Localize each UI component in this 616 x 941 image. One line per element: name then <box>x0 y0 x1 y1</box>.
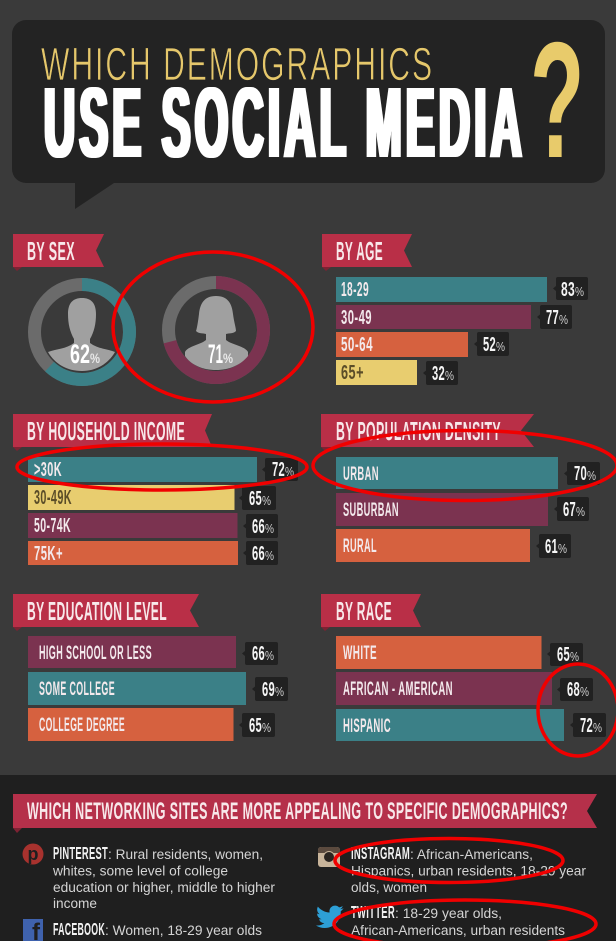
icon: pinterest: p <box>28 844 38 864</box>
bar: hispanic 72%: HISPANIC <box>343 716 391 737</box>
bar: white 65%: WHITE <box>343 643 377 664</box>
text: pinterest: : Rural residents, women, <box>108 847 263 862</box>
bar: under 30K 72%: 72 <box>272 459 285 481</box>
icon: instagram <box>318 847 340 867</box>
bar: suburban 67%: % <box>576 504 585 519</box>
text: instagram: Hispanics, urban residents, 18-29 year <box>351 864 587 878</box>
bar: suburban 67% <box>336 493 589 526</box>
heading: by race <box>321 594 421 631</box>
text: twitter <box>351 902 565 938</box>
bar: african-american 68%: AFRICAN - AMERICAN <box>343 679 453 700</box>
bar: 75K+ 66%: 75K+ <box>34 543 63 565</box>
female donut 71%: % <box>223 350 233 366</box>
bar: 75K+ 66%: % <box>265 548 274 563</box>
female donut 71% <box>168 282 264 378</box>
panel: by education level <box>13 594 288 741</box>
heading: by education level: BY EDUCATION LEVEL <box>27 596 167 626</box>
bar: 30-49K 65% <box>28 485 276 510</box>
bar: college degree 65%: COLLEGE DEGREE <box>39 715 125 736</box>
panel: by household income <box>13 414 298 565</box>
bar: african-american 68%: 68 <box>567 679 580 701</box>
male donut 62%: % <box>90 350 100 366</box>
heading: by household income: BY HOUSEHOLD INCOME <box>27 416 185 446</box>
text: instagram: INSTAGRAM <box>351 843 410 863</box>
female donut 71%: 71 <box>208 339 223 369</box>
bar: 50-64 52% <box>336 332 509 357</box>
male donut 62%: 62 <box>70 339 90 369</box>
bar: african-american 68%: % <box>580 684 589 699</box>
bar: college degree 65% <box>28 708 275 741</box>
bar: some college 69%: SOME COLLEGE <box>39 679 115 700</box>
bar: 18-29 83%: 83 <box>561 279 575 301</box>
bar: 65+ 32%: % <box>445 368 454 383</box>
bar: white 65% <box>336 636 583 669</box>
panel: networking sites <box>0 775 616 941</box>
bar: high school or less 66%: % <box>265 648 274 663</box>
icon: pinterest <box>22 844 44 864</box>
bar: 50-64 52%: % <box>496 339 505 354</box>
bar: urban 70%: URBAN <box>343 464 379 485</box>
bar: rural 61%: % <box>558 541 567 556</box>
bar: under 30K 72% <box>28 457 298 482</box>
bar: college degree 65%: % <box>262 720 271 735</box>
panel: by race <box>321 594 606 741</box>
heading: by household income <box>13 414 212 451</box>
question mark: ? <box>530 9 584 193</box>
panel: by sex <box>13 234 264 380</box>
text: twitter: African-Americans, urban residents <box>351 923 565 938</box>
bar: 65+ 32% <box>336 360 458 385</box>
bar: 30-49 77%: 30-49 <box>341 307 372 329</box>
bar: 30-49K 65%: 65 <box>249 488 262 510</box>
text: instagram: : African-Americans, <box>410 847 533 862</box>
male donut 62% <box>34 284 130 380</box>
text: pinterest: education or higher, middle to higher <box>53 880 275 895</box>
bar: high school or less 66%: 66 <box>252 643 265 665</box>
text: pinterest: income <box>53 896 97 911</box>
annotation: red circle around urban <box>313 430 616 500</box>
bar: urban 70% <box>336 457 600 489</box>
bar: some college 69% <box>28 672 288 705</box>
bar: 18-29 83%: 18-29 <box>341 279 369 301</box>
bar: urban 70%: 70 <box>574 463 587 485</box>
bar: 50-74K 66%: 66 <box>252 516 265 538</box>
bar: white 65%: 65 <box>557 644 570 666</box>
annotation: red circle around under 30K <box>17 444 307 490</box>
bar: some college 69%: % <box>275 684 284 699</box>
heading: by race: BY RACE <box>336 596 392 626</box>
text: twitter: : 18-29 year olds, <box>395 906 502 921</box>
bar: suburban 67%: 67 <box>563 499 576 521</box>
bar: under 30K 72%: % <box>285 464 294 479</box>
annotation: red circle around female <box>113 252 313 402</box>
icon: facebook <box>23 919 43 941</box>
bar: rural 61%: 61 <box>545 536 558 558</box>
bar: 18-29 83%: % <box>575 284 584 299</box>
title speech bubble <box>12 9 605 209</box>
bar: white 65%: % <box>570 649 579 664</box>
bar: urban 70%: % <box>587 468 596 483</box>
bar: 30-49 77%: % <box>559 312 568 327</box>
annotation: red circle around twitter <box>334 900 596 941</box>
bar: hispanic 72% <box>336 709 606 741</box>
panel: by population density <box>321 414 600 562</box>
heading: by sex <box>13 234 104 271</box>
text: facebook: : Women, 18-29 year olds <box>105 923 262 938</box>
bar: 50-74K 66%: % <box>265 521 274 536</box>
bar: 50-64 52%: 50-64 <box>341 334 373 356</box>
heading: by population density <box>321 414 534 451</box>
bar: rural 61% <box>336 529 571 562</box>
bar: 65+ 32%: 32 <box>432 363 445 385</box>
annotation: red circle around race values <box>538 664 616 756</box>
bar: some college 69%: 69 <box>262 679 275 701</box>
bar: 65+ 32%: 65+ <box>341 362 364 384</box>
bar: 50-74K 66%: 50-74K <box>34 515 71 537</box>
text: twitter: TWITTER <box>351 902 395 922</box>
bar: 30-49 77% <box>336 305 572 329</box>
bar: hispanic 72%: % <box>593 720 602 735</box>
text: pinterest: whites, some level of college <box>52 864 228 878</box>
panel: by age <box>322 234 588 385</box>
text: facebook <box>53 919 262 939</box>
bar: high school or less 66%: HIGH SCHOOL OR LESS <box>39 643 152 664</box>
heading: networking sites <box>13 794 597 833</box>
text: pinterest <box>52 843 275 911</box>
bar: african-american 68% <box>336 672 593 705</box>
text: pinterest: PINTEREST <box>53 843 108 863</box>
bar: 30-49K 65%: 30-49K <box>34 487 72 509</box>
bar: 50-74K 66% <box>28 513 278 538</box>
text: instagram <box>351 843 587 895</box>
text: facebook: FACEBOOK <box>53 919 105 939</box>
text: instagram: olds, women <box>351 880 427 895</box>
heading: by education level <box>13 594 199 631</box>
icon: twitter <box>316 906 344 928</box>
bar: college degree 65%: 65 <box>249 715 262 737</box>
bar: 30-49K 65%: % <box>262 493 271 508</box>
heading: by age <box>322 234 412 271</box>
bar: rural 61%: RURAL <box>343 536 377 557</box>
bar: 50-64 52%: 52 <box>483 334 496 356</box>
heading: by sex: BY SEX <box>27 236 75 266</box>
bar: 75K+ 66% <box>28 541 278 565</box>
annotation: red circle around instagram <box>335 838 563 882</box>
bar: 75K+ 66%: 66 <box>252 543 265 565</box>
bar: suburban 67%: SUBURBAN <box>343 500 399 521</box>
bar: under 30K 72%: >30K <box>34 459 62 481</box>
bar: 18-29 83% <box>336 277 588 302</box>
bar: 30-49 77%: 77 <box>546 307 559 329</box>
bar: hispanic 72%: 72 <box>580 715 593 737</box>
bar: high school or less 66% <box>28 636 278 668</box>
heading: by age: BY AGE <box>336 236 383 266</box>
